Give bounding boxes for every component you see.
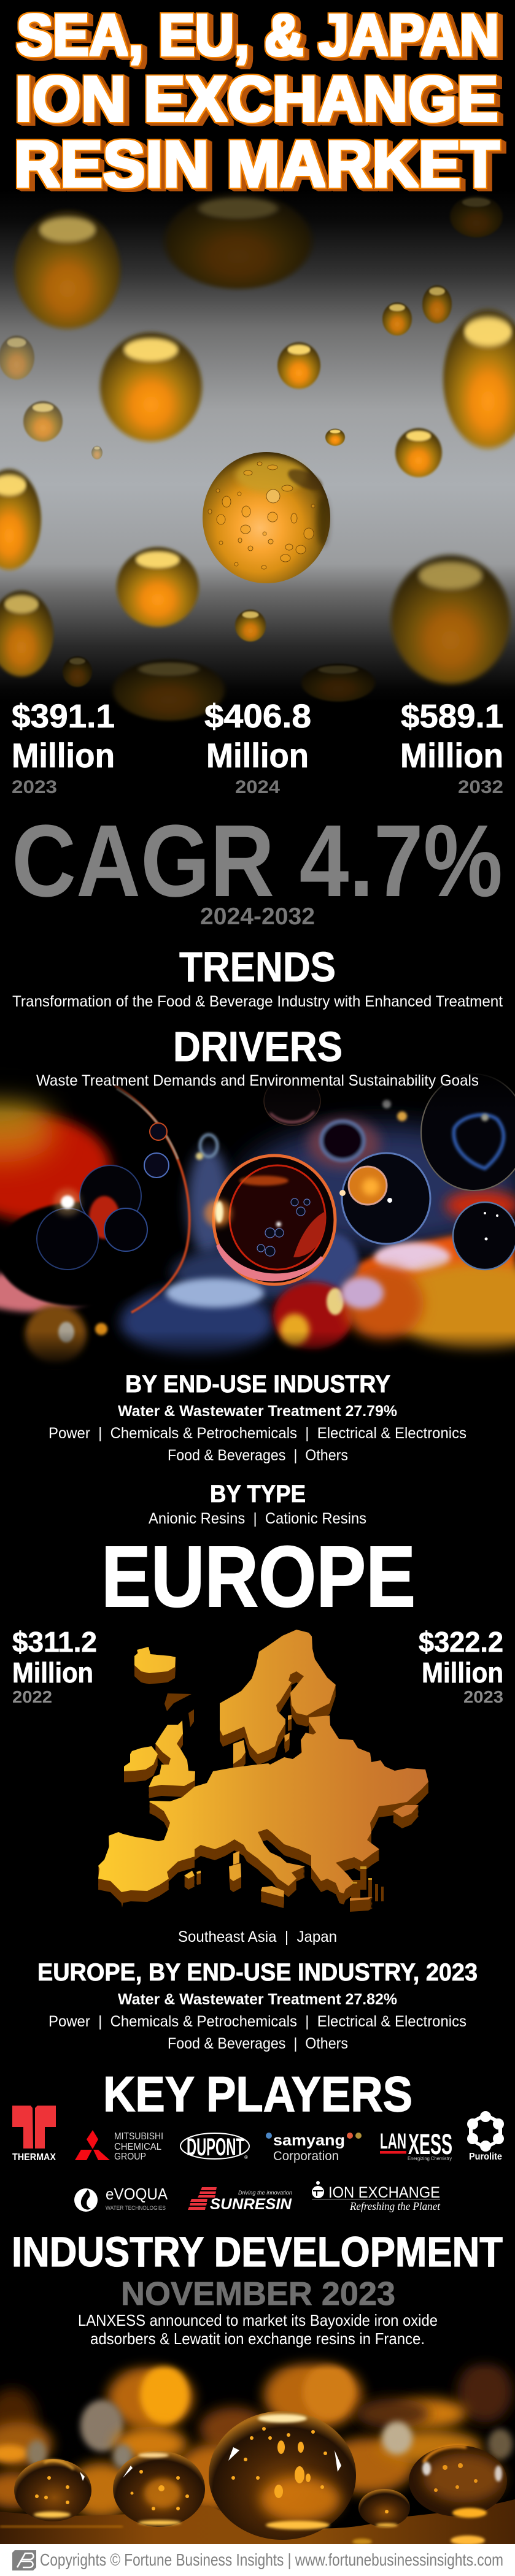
logo: Sunresin: Driving the innovation: [238, 2190, 292, 2196]
logo: Ion Exchange: Refreshing the Planet: [349, 2200, 441, 2212]
footer logo: [12, 2550, 36, 2570]
stat: 2024 market size: Million: [206, 736, 309, 775]
logo: Evoqua: WATER TECHNOLOGIES: [106, 2205, 166, 2211]
fade edges: [0, 1070, 515, 1113]
logo: Lanxess: LAN: [380, 2129, 406, 2153]
logo: Ion Exchange: ION EXCHANGE: [328, 2184, 440, 2201]
segment: by end-use industry: Power | Chemicals & Petrochemicals | Electrical & Electronics: [48, 1425, 467, 1442]
droplet: small right: [358, 2489, 410, 2527]
stat: Europe 2023: $322.2: [419, 1626, 503, 1658]
logo: Mitsubishi Chemical Group: GROUP: [114, 2152, 146, 2162]
logo: Mitsubishi Chemical Group: MITSUBISHI: [114, 2131, 163, 2142]
droplet: right: [409, 2445, 507, 2518]
stat: 2024 market size: $406.8: [204, 698, 311, 735]
industry development: adsorbers & Lewatit ion exchange resins in France.: [90, 2329, 425, 2348]
dim sphere top right: [450, 196, 503, 237]
droplet: left 2: [113, 2451, 205, 2527]
trends: Transformation of the Food & Beverage Industry with Enhanced Treatment: [12, 993, 503, 1010]
logo: DuPont: [180, 2133, 249, 2161]
trends: TRENDS: [179, 943, 336, 991]
stat: Europe 2023: Million: [422, 1657, 503, 1689]
logo: DuPont: DUPONT: [187, 2134, 244, 2161]
right bubble with orange core: [339, 1153, 430, 1244]
image: dark glass bubbles: [0, 1070, 515, 1369]
logo: Samyang Corporation: [266, 2132, 362, 2163]
logo: Samyang Corporation: Corporation: [273, 2149, 339, 2163]
dim droplet sphere bottom: [113, 659, 225, 721]
segment: by end-use industry: Food & Beverages | Others: [168, 1447, 348, 1464]
trends: [12, 943, 503, 1010]
segment: by type: [149, 1481, 366, 1527]
segment: by type: BY TYPE: [210, 1481, 306, 1508]
main sharp droplet sphere: [203, 452, 330, 583]
stat: Europe 2023: 2023: [463, 1687, 503, 1706]
small spheres right: [382, 302, 412, 335]
drivers description: Waste Treatment Demands and Environmental Sustainability Goals: [36, 1072, 479, 1089]
logo: Thermax: [12, 2106, 56, 2163]
key players heading: KEY PLAYERS: [103, 2067, 412, 2122]
map of Europe: [98, 1630, 428, 1912]
stat: 2024 market size: 2024: [235, 777, 280, 797]
stat: 2023 market size: Million: [12, 736, 115, 775]
industry development: LANXESS announced to market its Bayoxide iron oxide: [78, 2311, 438, 2329]
large left bubble: [0, 1086, 190, 1313]
industry development: NOVEMBER 2023: [121, 2275, 395, 2312]
stat: Europe 2022: [12, 1626, 97, 1706]
stat: 2023 market size: $391.1: [12, 698, 115, 735]
segment: by end-use industry: BY END-USE INDUSTRY: [125, 1371, 390, 1398]
logo: Mitsubishi Chemical Group: [75, 2130, 163, 2162]
stat: 2032 market size: Million: [400, 736, 503, 775]
stat: 2023 market size: 2023: [12, 777, 57, 797]
logo: Evoqua: eVOQUA: [106, 2185, 168, 2203]
CAGR headline: 2024-2032: [200, 903, 315, 930]
logo: Ion Exchange: [312, 2181, 441, 2212]
stat: 2024 market size: [204, 698, 311, 797]
region heading: Europe: EUROPE: [101, 1528, 416, 1625]
stat: Europe 2023: [419, 1626, 503, 1706]
drivers: DRIVERS: [173, 1023, 343, 1070]
segment: by end-use industry: [48, 1371, 467, 1464]
stat: 2023 market size: [12, 698, 115, 797]
stat: Europe 2022: $311.2: [12, 1626, 97, 1658]
stat: 2032 market size: [400, 698, 503, 797]
stat: 2032 market size: $589.1: [401, 698, 503, 735]
regions list: Southeast Asia | Japan: [178, 1928, 337, 1945]
industry development: [12, 2228, 503, 2348]
image: amber droplets: [0, 2349, 515, 2545]
central red bubble: [204, 1156, 335, 1284]
logo: Lanxess: [380, 2128, 452, 2161]
droplet: left 1: [14, 2459, 91, 2521]
blurred sphere top left: [15, 211, 120, 329]
logo: Evoqua: [74, 2185, 168, 2212]
stat: Europe 2022: 2022: [12, 1687, 52, 1706]
title: ION EXCHANGE: [15, 64, 498, 135]
logo: Lanxess: Energizing Chemistry: [408, 2155, 452, 2161]
background bokeh bubble: [321, 1121, 364, 1160]
logo: DuPont: ®: [244, 2155, 248, 2160]
segment: Europe by end-use industry: [37, 1959, 478, 2052]
logo: Thermax: THERMAX: [12, 2152, 56, 2163]
logo: Purolite: Purolite: [469, 2152, 502, 2162]
title: [14, 2, 500, 201]
droplet: big center: [209, 2411, 356, 2540]
stat: 2032 market size: 2032: [458, 777, 503, 797]
segment: Europe by end-use industry: Water & Wastewater Treatment 27.82%: [118, 1991, 397, 2008]
stat: Europe 2022: Million: [12, 1657, 93, 1689]
top right bubble: [421, 1074, 515, 1190]
segment: by type: Anionic Resins | Cationic Resins: [149, 1510, 366, 1527]
logo: Purolite: [467, 2111, 504, 2162]
segment: by end-use industry: Water & Wastewater Treatment 27.79%: [118, 1403, 397, 1420]
top small bubble: [264, 1076, 320, 1125]
bokeh lights: [0, 2361, 513, 2518]
segment: Europe by end-use industry: Power | Chemicals & Petrochemicals | Electrical & Electronics: [48, 2013, 467, 2030]
logo: Lanxess: XESS: [408, 2128, 452, 2160]
logo: Samyang Corporation: samyang: [273, 2132, 345, 2149]
segment: Europe by end-use industry: Food & Beverages | Others: [168, 2035, 348, 2052]
dim sphere top center: [165, 193, 312, 289]
title: RESIN MARKET: [14, 127, 500, 201]
logo: Sunresin: SUNRESIN: [210, 2196, 292, 2213]
logo: Sunresin: [188, 2187, 292, 2213]
segment: Europe by end-use industry: EUROPE, BY END-USE INDUSTRY, 2023: [37, 1959, 478, 1986]
left glow: [0, 1116, 110, 1221]
footer: [0, 2544, 515, 2576]
logo: Mitsubishi Chemical Group: CHEMICAL: [114, 2142, 161, 2152]
lower bokeh band: [120, 1286, 274, 1357]
bottom right bubble: [453, 1202, 515, 1270]
floor: [0, 2499, 515, 2544]
hero image: golden resin spheres: [0, 190, 515, 721]
